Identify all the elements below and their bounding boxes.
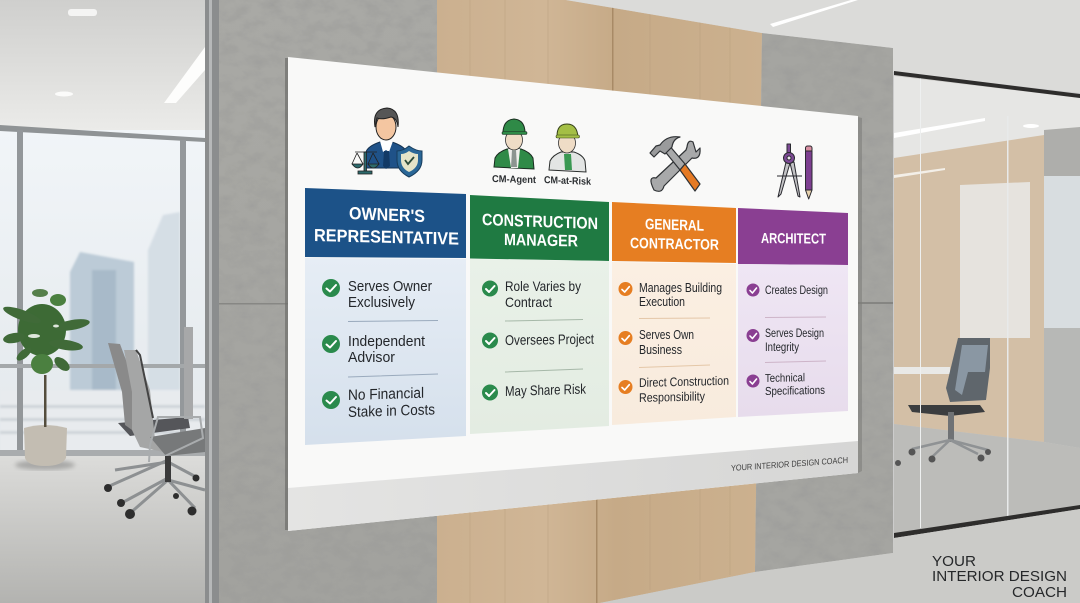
board footer text: YOUR INTERIOR DESIGN COACH <box>731 455 848 473</box>
icon: CM-Agent <box>492 119 537 186</box>
item: technical specifications: Technical <box>765 372 805 385</box>
item: manages building execution: Manages Building <box>639 281 722 295</box>
body: general contractor <box>612 262 736 425</box>
item: serves own business: Business <box>639 343 682 357</box>
icon: owner's representative <box>352 108 422 177</box>
wood wall <box>437 0 762 603</box>
item: serves owner exclusively <box>322 278 432 311</box>
item: no financial stake in costs: Stake in Costs <box>348 401 435 421</box>
column: general contractor <box>612 202 736 425</box>
item: serves owner exclusively: Serves Owner <box>348 278 432 295</box>
potted plant <box>1 289 91 470</box>
reflected light strips <box>894 118 985 138</box>
item: oversees project: Oversees Project <box>505 331 594 348</box>
header: construction manager: MANAGER <box>504 231 578 250</box>
item: independent advisor <box>322 333 426 366</box>
column: construction manager <box>470 195 609 434</box>
item: serves design integrity <box>746 328 824 354</box>
ceiling right <box>566 0 1080 93</box>
item: role varies by contract: Role Varies by <box>505 278 581 294</box>
header: owner's representative <box>305 188 466 258</box>
concrete wall left <box>205 0 437 603</box>
item: serves owner exclusively: Exclusively <box>348 294 415 311</box>
logo bottom right: YOUR <box>932 554 976 570</box>
ceiling lights left <box>55 9 205 103</box>
item: independent advisor: Independent <box>348 333 426 350</box>
label: CM-Agent: CM-Agent <box>492 174 537 186</box>
floor right <box>600 509 1080 603</box>
item: serves design integrity: Integrity <box>765 342 799 354</box>
item: creates design <box>746 284 828 297</box>
logo bottom right <box>932 554 1067 601</box>
item: may share risk <box>482 381 587 400</box>
glass frame top and bottom <box>894 71 1080 98</box>
item: direct construction responsibility <box>618 374 729 405</box>
item: oversees project <box>482 331 594 348</box>
wall board <box>288 57 858 531</box>
item: serves own business: Serves Own <box>639 328 694 342</box>
item: direct construction responsibility: Responsibility <box>639 389 706 405</box>
icon: hammer and wrench <box>650 137 700 191</box>
column: architect <box>738 208 848 417</box>
meeting table <box>894 367 950 374</box>
concrete wall right <box>755 33 893 572</box>
window frames <box>0 125 205 142</box>
item: no financial stake in costs: No Financial <box>348 385 424 404</box>
item: manages building execution: Execution <box>639 295 685 309</box>
header: architect <box>738 208 848 265</box>
icon: shield <box>397 146 422 177</box>
icon: CM-at-Risk <box>544 124 591 188</box>
item: direct construction responsibility: Direct Construction <box>639 374 729 390</box>
item: no financial stake in costs <box>322 385 435 421</box>
skyline buildings <box>0 212 205 452</box>
board bottom band <box>288 441 858 531</box>
header: architect: ARCHITECT <box>761 231 826 248</box>
logo bottom right: COACH <box>1012 585 1067 601</box>
body: owner's representative <box>305 258 466 445</box>
header: owner's representative: OWNER'S <box>349 203 425 226</box>
icon: pencil <box>806 146 812 199</box>
item: technical specifications <box>746 372 825 398</box>
column: owner's representative <box>305 188 466 445</box>
header: general contractor: CONTRACTOR <box>630 235 719 254</box>
header: general contractor <box>612 202 736 263</box>
item: may share risk: May Share Risk <box>505 381 587 399</box>
office chairs left <box>104 327 205 519</box>
meeting room chair <box>895 338 991 466</box>
glass meeting room right <box>894 71 1080 538</box>
item: independent advisor: Advisor <box>348 349 395 366</box>
body: construction manager <box>470 259 609 434</box>
item: technical specifications: Specifications <box>765 385 825 398</box>
item: serves design integrity: Serves Design <box>765 328 824 340</box>
header: owner's representative: REPRESENTATIVE <box>314 225 459 249</box>
item: manages building execution <box>618 281 722 309</box>
icon: compass and pencil <box>777 144 812 199</box>
body: architect <box>738 264 848 417</box>
logo bottom right: INTERIOR DESIGN <box>932 569 1067 585</box>
item: serves own business <box>618 328 694 357</box>
item: role varies by contract <box>482 278 581 310</box>
header: construction manager: CONSTRUCTION <box>482 211 598 233</box>
label: CM-at-Risk: CM-at-Risk <box>544 175 591 188</box>
left office room <box>0 0 210 603</box>
item: role varies by contract: Contract <box>505 294 552 310</box>
icon: scales <box>352 152 379 174</box>
header: construction manager <box>470 195 609 261</box>
item: creates design: Creates Design <box>765 285 828 297</box>
header: general contractor: GENERAL <box>645 216 704 235</box>
